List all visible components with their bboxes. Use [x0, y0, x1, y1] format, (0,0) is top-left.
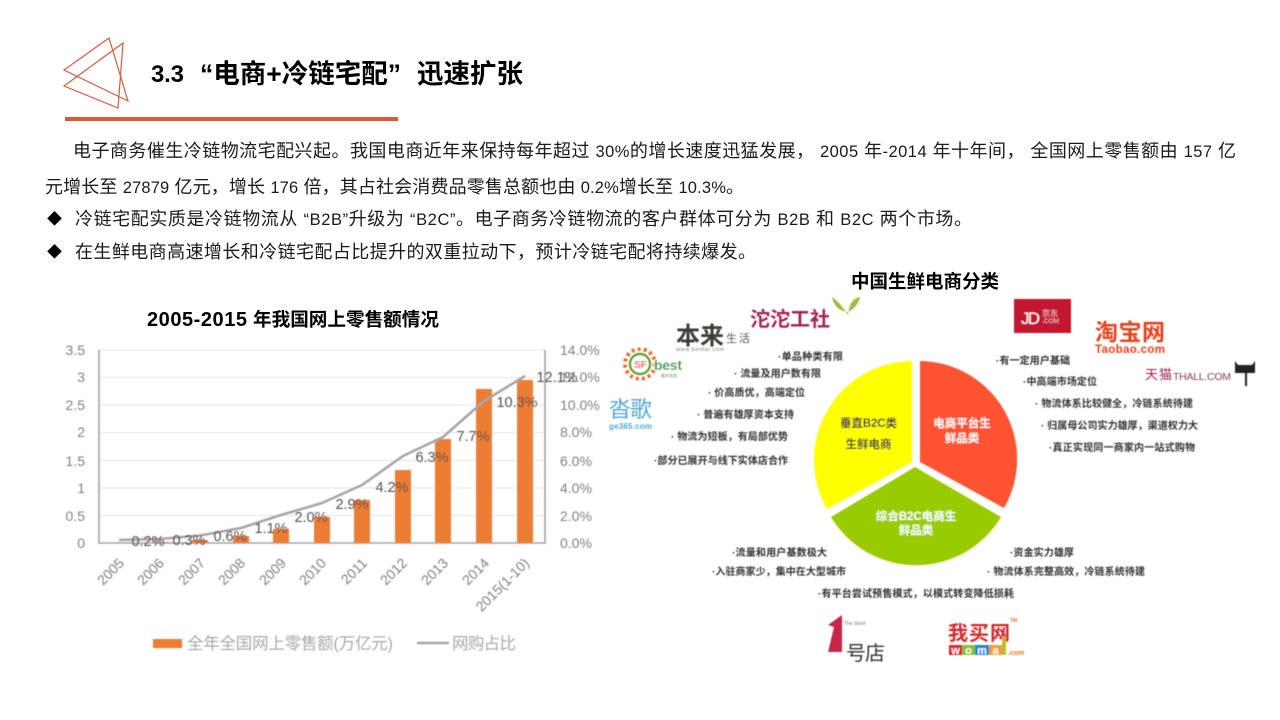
- left axis labels: [66, 342, 85, 551]
- logo: JD: .COM: [1042, 318, 1059, 325]
- title: 迅速扩张: [417, 59, 523, 89]
- pie labels: 垂直B2C类: [840, 416, 898, 430]
- list: integrated B2C traits, centre: ·有平台尝试预售模式，以模式转变降低损耗: [818, 587, 1014, 600]
- list: integrated B2C traits, right: ·资金实力雄厚: [1010, 546, 1074, 559]
- text block: introduction: 电子商务催生冷链物流宅配兴起。我国电商近年来保持每年超过 30%的增长速度迅猛发展， 2005 年-2014 年十年间， 全国网上零售额由 157 亿: [73, 141, 1236, 161]
- chart heading: 年我国网上零售额情况: [253, 309, 439, 330]
- logo: Benlai: www.benlai.com: [675, 347, 724, 353]
- right axis labels: 12.0%: [560, 369, 600, 385]
- list: integrated B2C traits, left: ·入驻商家少，集中在大型城市: [712, 565, 846, 578]
- logo: Womai: m: [977, 645, 987, 657]
- icon: overlapping triangles: [64, 38, 128, 108]
- logo: JD: 京东: [1042, 308, 1058, 318]
- category labels: 2005: [94, 555, 127, 588]
- logo: Yihaodian: 号店: [846, 642, 885, 665]
- text block: introduction: [45, 141, 1236, 197]
- left axis labels: 0.5: [66, 508, 85, 524]
- right axis labels: 6.0%: [560, 453, 592, 469]
- data labels: 0.3%: [172, 533, 206, 549]
- logo: Benlai: 生活: [726, 331, 750, 345]
- chart heading: 2005-2015: [147, 309, 247, 331]
- data labels: 1.1%: [254, 521, 288, 537]
- title: “电商+冷链宅配”: [200, 59, 401, 89]
- bullet: forecast: ◆: [47, 244, 62, 261]
- left axis labels: 2.5: [66, 397, 85, 413]
- chart axes: [99, 350, 545, 543]
- category labels: 2015(1-10): [472, 555, 532, 615]
- list: platform traits: ·中高端市场定位: [1023, 375, 1097, 388]
- pie heading: 中国生鲜电商分类: [851, 271, 999, 292]
- segment: integrated B2C: [831, 467, 1001, 565]
- logo: Womai: [948, 618, 1024, 657]
- logo: Womai: o: [965, 645, 972, 657]
- category labels: 2006: [134, 555, 167, 588]
- logo: Taobao: 淘宝网: [1095, 319, 1165, 345]
- line: online share: [119, 376, 525, 540]
- logo: JD: JD: [1021, 309, 1040, 328]
- category labels: 2011: [338, 555, 370, 587]
- logo: Taobao: Taobao.com: [1095, 344, 1165, 356]
- bullet: forecast: 在生鲜电商高速增长和冷链宅配占比提升的双重拉动下，预计冷链宅配将持续爆发。: [75, 242, 756, 262]
- right axis labels: 4.0%: [560, 480, 592, 496]
- right axis labels: 2.0%: [560, 508, 592, 524]
- bullet: B2B to B2C: ◆: [47, 211, 62, 228]
- category labels: 2014: [459, 555, 492, 588]
- list: integrated B2C traits, left: [712, 546, 846, 578]
- logo: SF best: [625, 349, 682, 379]
- combo chart: online retail sales: [66, 342, 600, 653]
- pie labels: 鲜品类: [899, 523, 934, 537]
- logo: Womai: 我买网: [948, 622, 1010, 645]
- data labels: 2.9%: [335, 497, 369, 513]
- logo: Lege: 沓歌: [609, 397, 652, 422]
- logo: Womai: .com: [1008, 650, 1024, 657]
- category labels: 2013: [418, 555, 451, 588]
- data labels: [131, 370, 578, 550]
- data labels: 7.7%: [456, 429, 490, 445]
- list: platform traits: · 物流体系比较健全，冷链系统待建: [1035, 397, 1193, 410]
- pie labels: 生鲜电商: [846, 437, 892, 451]
- category labels: [94, 555, 532, 615]
- category labels: 2010: [296, 555, 329, 588]
- logo: Tmall: THALL.COM: [1173, 371, 1231, 383]
- logo: JD: [1014, 299, 1071, 333]
- bullet: B2B to B2C: 冷链宅配实质是冷链物流从 “B2B”升级为 “B2C”。电子商务冷链物流的客户群体可分为 B2B 和 B2C 两个市场。: [75, 209, 972, 229]
- category labels: 2007: [175, 555, 208, 588]
- right axis labels: [560, 342, 600, 551]
- pie labels: 鲜品类: [945, 431, 980, 445]
- right axis labels: 10.0%: [560, 397, 600, 413]
- segment: vertical B2C: [814, 361, 912, 509]
- logo: Yihaodian: The Store: [844, 621, 866, 627]
- category labels: 2012: [377, 555, 410, 588]
- left axis labels: 3.5: [66, 342, 85, 358]
- left axis labels: 0: [77, 535, 85, 551]
- chart heading: [147, 309, 439, 331]
- list: platform traits: [996, 354, 1198, 454]
- list: integrated B2C traits, right: · 物流体系完整高效，冷链系统待建: [987, 565, 1145, 578]
- left axis labels: 1.5: [66, 453, 85, 469]
- logo: Tuotuo: 沱沱工社: [750, 307, 830, 331]
- logo: Womai: a: [992, 645, 999, 657]
- logo: Tuotuo: [750, 297, 860, 331]
- logo: Lege: ge365.com: [609, 422, 652, 431]
- logo: Benlai: 本来: [676, 323, 724, 350]
- list: vertical B2C traits: ·部分已展开与线下实体店合作: [654, 454, 788, 467]
- list: vertical B2C traits: ·单品种类有限: [778, 350, 843, 363]
- title: [151, 59, 523, 89]
- right axis labels: 14.0%: [560, 342, 600, 358]
- logo: Tmall: [1145, 361, 1255, 386]
- category labels: 2008: [215, 555, 248, 588]
- right axis labels: 0.0%: [560, 535, 592, 551]
- text block: introduction: 元增长至 27879 亿元，增长 176 倍，其占社会消费品零售总额也由 0.2%增长至 10.3%。: [45, 177, 744, 197]
- data labels: 10.3%: [496, 395, 538, 411]
- logo: SF best: SF: [634, 360, 647, 371]
- left axis labels: 2: [77, 424, 85, 440]
- logo: SF best: best: [654, 357, 682, 373]
- list: vertical B2C traits: · 价高质优，高端定位: [708, 386, 805, 399]
- logo: Womai: w: [950, 645, 960, 657]
- title underline: [65, 117, 398, 121]
- pie labels: [840, 416, 991, 537]
- logo: Yihaodian: [828, 615, 885, 665]
- pie labels: 综合B2C电商生: [876, 509, 956, 523]
- logo: Womai: TM: [1010, 618, 1017, 624]
- list: vertical B2C traits: [654, 350, 843, 467]
- list: platform traits: ·有一定用户基础: [996, 354, 1070, 367]
- logo: Tmall: 天猫: [1145, 367, 1172, 382]
- left axis labels: 1: [77, 480, 85, 496]
- list: integrated B2C traits, left: ·流量和用户基数极大: [732, 546, 827, 559]
- title: 3.3: [151, 61, 184, 88]
- left axis labels: 3: [77, 369, 85, 385]
- list: platform traits: ·真正实现同一商家内一站式购物: [1049, 441, 1195, 454]
- list: integrated B2C traits, right: [987, 546, 1145, 578]
- category labels: 2009: [256, 555, 289, 588]
- data labels: 0.6%: [213, 529, 247, 545]
- segment: platform: [920, 361, 1017, 508]
- data labels: 2.0%: [294, 510, 328, 526]
- legend: [153, 634, 516, 653]
- data labels: 12.1%: [536, 370, 578, 386]
- list: vertical B2C traits: · 普遍有雄厚资本支持: [697, 408, 794, 421]
- pie labels: 电商平台生: [933, 416, 991, 430]
- logo: Benlai: [675, 323, 750, 353]
- data labels: 0.2%: [131, 534, 165, 550]
- bars: [152, 380, 533, 543]
- logo: SF best: 顺丰优选: [661, 372, 677, 378]
- legend: 全年全国网上零售额(万亿元): [187, 634, 393, 653]
- data labels: 4.2%: [375, 480, 409, 496]
- list: vertical B2C traits: · 物流为短板，有局部优势: [671, 430, 788, 443]
- legend: 网购占比: [452, 634, 516, 653]
- pie chart: fresh e-commerce categories: [814, 361, 1017, 565]
- right axis labels: 8.0%: [560, 424, 592, 440]
- list: platform traits: · 归属母公司实力雄厚，渠道权力大: [1041, 419, 1198, 432]
- data labels: 6.3%: [415, 450, 449, 466]
- list: vertical B2C traits: · 流量及用户数有限: [734, 367, 821, 380]
